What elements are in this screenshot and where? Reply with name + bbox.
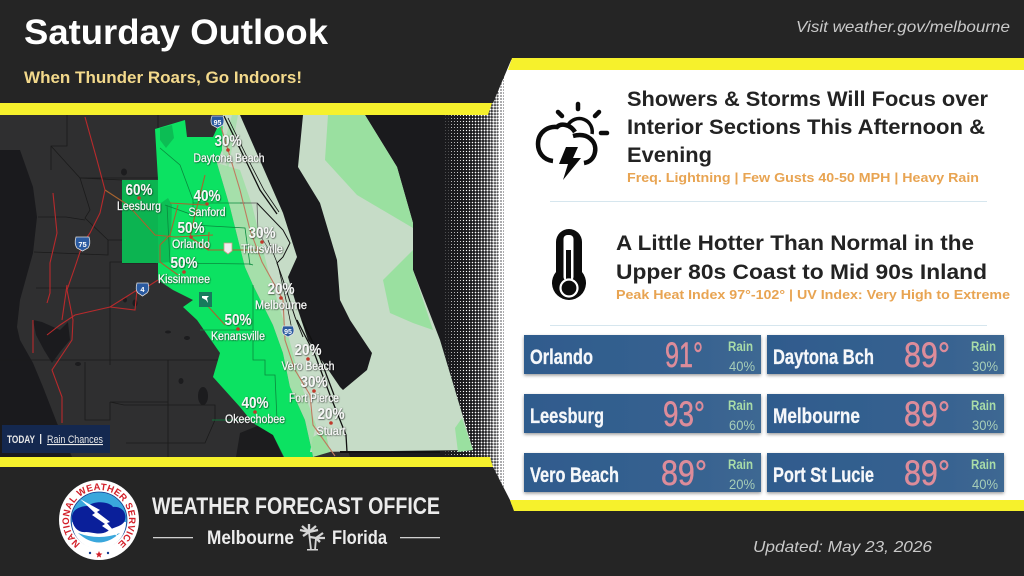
card: Daytona Bch: Rain [971, 339, 996, 354]
card: Port St Lucie [767, 453, 1004, 493]
heading: hotter than normal [616, 232, 987, 284]
rain chance labels: 50% [178, 220, 204, 237]
card: Leesburg: Rain [728, 398, 753, 413]
heading: showers and storms: Interior Sections This Afternoon & [627, 116, 985, 139]
card: Port St Lucie: Rain [971, 457, 996, 472]
tampa bay water [33, 320, 70, 363]
card: Daytona Bch [767, 335, 1004, 375]
card: Orlando: Orlando [530, 346, 593, 369]
card: Leesburg: 93° [663, 395, 705, 434]
rain chance labels: Melbourne [255, 300, 307, 312]
heading: showers and storms [627, 88, 988, 167]
card: Melbourne: Rain [971, 398, 996, 413]
card: Daytona Bch: 30% [972, 359, 998, 374]
rain chance labels: Fort Pierce [289, 393, 339, 405]
rain chance labels: 40% [194, 188, 220, 205]
rain chance labels [117, 133, 346, 438]
interstate shields: 95 [214, 120, 221, 127]
title: Saturday Outlook [24, 13, 329, 52]
map legend: today rain chances: TODAY [7, 434, 35, 446]
card: Leesburg: 60% [729, 418, 755, 433]
map legend: today rain chances: Rain Chances [47, 434, 103, 446]
card: Vero Beach: 20% [729, 477, 755, 492]
card: Vero Beach: 89° [661, 454, 707, 493]
land mass [0, 114, 350, 457]
interstate shields: 4 [140, 285, 145, 294]
card: Port St Lucie: 40% [972, 477, 998, 492]
icon: sun behind storm cloud with lightning [538, 104, 607, 180]
card: Vero Beach: Rain [728, 457, 753, 472]
darker green 60 percent area [122, 180, 158, 263]
footer dark band [0, 467, 1024, 576]
rain chance labels: Orlando [172, 239, 210, 251]
county lines on green [160, 148, 277, 420]
yellow rule: below map [0, 457, 493, 467]
rain chance labels: 20% [294, 342, 322, 359]
subtitle: When Thunder Roars, Go Indoors! [24, 69, 302, 87]
heat details: Peak Heat Index 97°-102° | UV Index: Very High to Extreme [616, 287, 1010, 302]
rain chance labels: 30% [214, 133, 242, 150]
rain chance labels: 30% [300, 374, 328, 391]
yellow rule: panel bottom [510, 500, 1024, 511]
logo: National Weather Service: NATIONAL WEATHER SERVICE [62, 483, 136, 548]
icon: thermometer [552, 229, 586, 300]
highways [33, 117, 158, 423]
white content panel backing [500, 60, 1024, 505]
interstate shields [75, 116, 294, 337]
rain chance labels: 50% [224, 312, 252, 329]
icon: palm trees [300, 524, 325, 550]
rain chance labels: Vero Beach [282, 361, 334, 373]
rain chance labels: Kissimmee [158, 274, 210, 286]
heading: showers and storms: Showers & Storms Will Focus over [627, 88, 988, 111]
office location: Florida [332, 528, 387, 549]
heading: showers and storms: Evening [627, 144, 712, 167]
map: rain chances [0, 114, 473, 457]
card: Vero Beach: Vero Beach [530, 464, 619, 487]
office location: Melbourne [207, 528, 294, 549]
card: Melbourne: 30% [972, 418, 998, 433]
office location [153, 528, 440, 549]
interstate shields: 75 [78, 240, 87, 249]
interstate shields: 95 [284, 329, 292, 336]
pale green coastal and offshore area [217, 115, 473, 452]
rain chance labels: Daytona Beach [194, 153, 264, 165]
card: Melbourne: Melbourne [773, 405, 860, 428]
rain chance labels: 20% [268, 281, 294, 298]
rain chance labels: 50% [170, 255, 198, 272]
card: Daytona Bch: Daytona Bch [773, 346, 874, 369]
card: Orlando [524, 335, 761, 375]
card: Orlando: 40% [729, 359, 755, 374]
heading: hotter than normal: A Little Hotter Than Normal in the [616, 232, 974, 255]
card: Orlando: Rain [728, 339, 753, 354]
card: Melbourne [767, 394, 1004, 434]
city markers [137, 148, 333, 425]
medium green offshore patches [217, 115, 473, 457]
yellow rule: panel top [508, 58, 1024, 70]
card: Daytona Bch: 89° [904, 336, 950, 375]
card: Leesburg: Leesburg [530, 405, 604, 428]
office name: WEATHER FORECAST OFFICE [152, 493, 440, 520]
coastal island outlines [224, 116, 440, 452]
heading: hotter than normal: Upper 80s Coast to Mid 90s Inland [616, 261, 987, 284]
rain chance labels: 20% [318, 406, 344, 423]
halftone transition strip [0, 60, 504, 505]
updated date: Updated: May 23, 2026 [753, 539, 932, 556]
rain chance labels: Leesburg [117, 201, 161, 213]
header dark band [0, 0, 1024, 103]
website link: Visit weather.gov/melbourne [796, 19, 1010, 36]
rain chance labels: Okeechobee [225, 414, 285, 426]
rain chance labels: 30% [248, 225, 276, 242]
storm details: Freq. Lightning | Few Gusts 40-50 MPH | Heavy Rain [627, 170, 979, 185]
county lines on land [31, 115, 218, 457]
card: Melbourne: 89° [904, 395, 950, 434]
card: Vero Beach [524, 453, 761, 493]
rain chance labels: 40% [242, 395, 268, 412]
rain chance labels: Kenansville [211, 331, 265, 343]
rain chance labels: 60% [126, 182, 152, 199]
rain chance labels: Stuart [316, 426, 346, 438]
bright green rain area [155, 115, 313, 457]
card: Leesburg [524, 394, 761, 434]
card: Orlando: 91° [665, 336, 703, 375]
rain chance labels: Sanford [188, 207, 226, 219]
map legend: today rain chances [2, 425, 110, 453]
inland lakes [75, 168, 283, 457]
yellow rule: above map [0, 103, 492, 115]
card: Port St Lucie: Port St Lucie [773, 464, 874, 487]
card: Port St Lucie: 89° [904, 454, 950, 493]
rain chance labels: Titusville [241, 244, 283, 256]
